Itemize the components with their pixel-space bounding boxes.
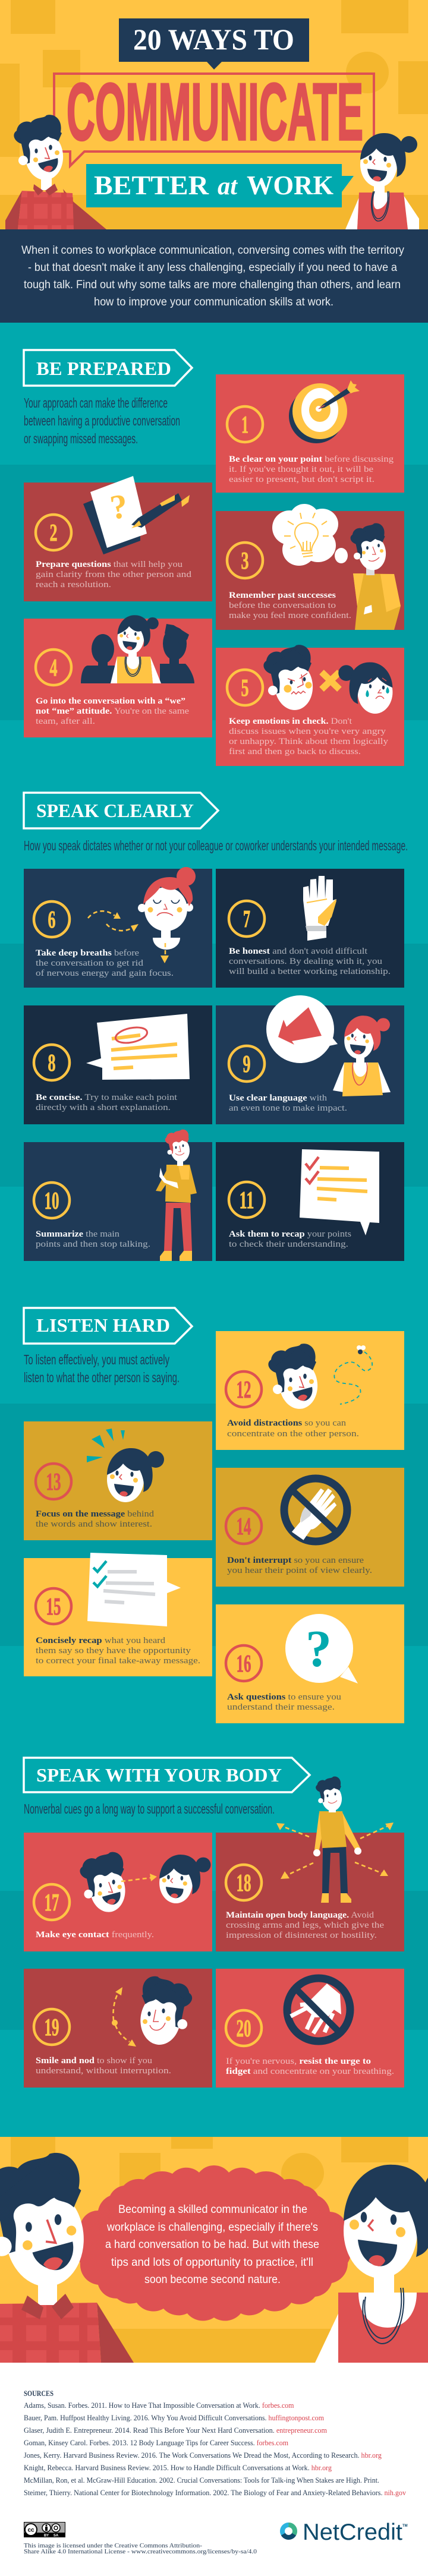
heading: be prepared: BE PREPARED xyxy=(36,358,171,379)
panel 9: clear language: an even tone to make impact. xyxy=(229,1103,347,1113)
character: woman xyxy=(345,133,419,229)
panel 10: summarize: Summarize the main xyxy=(36,1229,120,1239)
icon: question bubble xyxy=(285,1614,358,1683)
panel 17: eye contact xyxy=(24,1833,212,1951)
panel 1: clear point: 1 xyxy=(241,411,248,438)
icon: x mark xyxy=(322,672,339,689)
character: woman xyxy=(315,2165,428,2363)
section: be prepared xyxy=(24,350,404,766)
heading: be prepared xyxy=(24,350,192,386)
title: better at work: WORK xyxy=(247,171,333,200)
panel 2: prepare questions: reach a resolution. xyxy=(36,580,111,589)
panel 7: be honest xyxy=(216,869,404,988)
heading: listen hard: LISTEN HARD xyxy=(36,1314,170,1336)
panel 3: past successes: before the conversation to xyxy=(229,601,336,610)
intro panel: how to improve your communication skills at work. xyxy=(94,296,333,308)
panel 9: clear language xyxy=(216,995,404,1124)
panel 4: we not me: not “me” attitude. You're on the same xyxy=(36,707,189,716)
panel 7: be honest: Be honest and don't avoid difficult xyxy=(229,947,368,956)
panel 10: summarize: points and then stop talking. xyxy=(36,1240,150,1249)
panel 20: resist the urge to fidget: 20 xyxy=(237,2014,251,2042)
icon: note with highlighted line xyxy=(86,1014,190,1080)
icon: breathing woman xyxy=(138,867,196,950)
callout: closing message xyxy=(75,2165,353,2321)
panel 12: avoid distractions: Avoid distractions so you can xyxy=(227,1418,347,1428)
panel 15: concisely recap xyxy=(24,1553,212,1676)
panel 2: prepare questions: gain clarity from the other person and xyxy=(36,570,192,579)
panel 18: open body language xyxy=(216,1777,404,1951)
license badge: cc xyxy=(27,2527,34,2534)
panel 16: ask questions: 16 xyxy=(237,1650,251,1677)
intro text: or swapping missed messages. xyxy=(24,431,138,446)
panel 5: keep emotions in check: discuss issues when you're very angry xyxy=(229,727,386,736)
panel 5: keep emotions in check: 5 xyxy=(241,674,248,701)
title: 20 ways to xyxy=(119,18,309,70)
panel 13: focus on the message: 13 xyxy=(46,1468,61,1495)
icon: thought bubble with light bulb xyxy=(272,504,348,566)
license badge xyxy=(24,2522,65,2537)
intro text xyxy=(24,395,180,446)
panel 15: concisely recap: Concisely recap what you heard xyxy=(36,1636,166,1645)
panel 11: ask to recap: Ask them to recap your points xyxy=(229,1229,351,1239)
panel 19: smile and nod: Smile and nod to show if you xyxy=(36,2056,153,2066)
sources: McMillan, Ron, et al. McGraw-Hill Education. 2002. Crucial Conversations: Tools for Talk-ing When Stakes are High. Print. xyxy=(24,2476,379,2484)
character: speaking woman xyxy=(333,1016,391,1096)
panel 9: clear language: Use clear language with xyxy=(229,1093,328,1103)
icon: crying woman xyxy=(338,663,392,714)
closing banner xyxy=(0,2137,428,2363)
license text: Share Alike 4.0 International License - www.creativecommons.org/licenses/by-sa/4.0 xyxy=(24,2548,257,2555)
icon: no hand sign xyxy=(284,1478,347,1544)
panel 3: past successes: 3 xyxy=(241,547,248,574)
intro text: To listen effectively, you must actively xyxy=(24,1352,169,1367)
arrows: breath flow xyxy=(88,911,169,963)
panel 5: keep emotions in check: Keep emotions in check. Don't xyxy=(229,717,353,726)
panel 6: deep breaths xyxy=(24,867,212,988)
panel 4: we not me: team, after all. xyxy=(36,717,95,726)
callout: closing message: soon become second nature. xyxy=(144,2274,281,2286)
panel 12: avoid distractions: concentrate on the other person. xyxy=(227,1429,359,1439)
panel 19: smile and nod: understand, without interruption. xyxy=(36,2066,171,2076)
panel 7: be honest: conversations. By dealing with it, you xyxy=(229,957,383,966)
panel 4: we not me: 4 xyxy=(50,654,57,681)
heading: speak with your body: SPEAK WITH YOUR BODY xyxy=(36,1764,282,1786)
title: 20 ways to: 20 WAYS TO xyxy=(133,23,294,56)
icon: checklist note xyxy=(87,1553,181,1626)
icon: question sheet and pen xyxy=(83,476,190,554)
panel 12: avoid distractions xyxy=(216,1331,404,1450)
sources: SOURCES xyxy=(24,2389,54,2398)
intro text xyxy=(24,1352,180,1385)
character: thinking man xyxy=(351,523,401,630)
panel 19: smile and nod: 19 xyxy=(44,2013,59,2041)
license badge: SA xyxy=(54,2534,59,2537)
intro text: between having a productive conversation xyxy=(24,413,180,428)
sources: Knight, Rebecca. Harvard Business Review. 2015. How to Handle Difficult Conversations at Work. hbr.org xyxy=(24,2464,332,2472)
panel 2: prepare questions xyxy=(24,476,212,601)
icon: two faces looking at each other xyxy=(80,1852,210,1914)
panel 9: clear language: 9 xyxy=(243,1050,251,1077)
icon: fly with dashed path xyxy=(334,1345,372,1404)
panel 20: resist the urge to fidget: fidget and concentrate on your breathing. xyxy=(226,2067,394,2076)
panel 18: open body language: 18 xyxy=(237,1869,251,1896)
heading: listen hard xyxy=(24,1308,192,1344)
panel 8: be concise: directly with a short explanation. xyxy=(36,1103,171,1112)
panel 7: be honest: 7 xyxy=(243,905,250,932)
panel 5: keep emotions in check xyxy=(216,645,404,766)
intro panel xyxy=(0,229,428,323)
icon: no fidgeting sign xyxy=(287,1978,350,2041)
sources: Goman, Kinsey Carol. Forbes. 2013. 12 Body Language Tips for Career Success. forbes.com xyxy=(24,2439,288,2447)
panel 16: ask questions: Ask questions to ensure you xyxy=(227,1692,342,1702)
sources: Glaser, Judith E. Entrepreneur. 2014. Read This Before Your Next Hard Conversation. entrepreneur.com xyxy=(24,2426,327,2435)
panel 20: resist the urge to fidget xyxy=(216,1969,404,2088)
panel 13: focus on the message xyxy=(24,1421,212,1540)
callout: closing message: a hard conversation to be had. But with these xyxy=(105,2238,319,2251)
logo: NetCredit: NetCredit xyxy=(303,2520,402,2545)
panel 15: concisely recap: to correct your final take-away message. xyxy=(36,1656,200,1666)
icon: raised hand xyxy=(303,876,336,941)
sources: Adams, Susan. Forbes. 2011. How to Have That Impossible Conversation at Work. forbes.com xyxy=(24,2401,294,2410)
icon: target xyxy=(289,380,360,443)
panel 8: be concise: 8 xyxy=(48,1049,56,1076)
sources xyxy=(24,2389,407,2497)
panel 3: past successes: Remember past successes xyxy=(229,591,336,600)
intro text: listen to what the other person is saying. xyxy=(24,1370,180,1385)
panel 13: focus on the message: the words and show interest. xyxy=(36,1519,152,1529)
intro text: Your approach can make the difference xyxy=(24,395,168,411)
panel 5: keep emotions in check: or unhappy. Think about them logically xyxy=(229,737,389,746)
icon: nodding man xyxy=(138,1976,192,2047)
heading: speak with your body xyxy=(24,1758,310,1792)
icon: question sheet and pen: ? xyxy=(108,486,130,527)
license text xyxy=(24,2542,257,2555)
panel 6: deep breaths: of nervous energy and gain focus. xyxy=(36,969,174,978)
panel 19: smile and nod xyxy=(24,1969,212,2088)
icon: checklist bubble xyxy=(300,1149,379,1235)
heading: speak clearly: SPEAK CLEARLY xyxy=(36,800,194,821)
panel 18: open body language: impression of disinterest or hostility. xyxy=(226,1931,377,1940)
panel 3: past successes: make you feel more confident. xyxy=(229,611,351,620)
panel 4: we not me: Go into the conversation with a “we” xyxy=(36,696,185,706)
callout: closing message: Becoming a skilled communicator in the xyxy=(118,2203,307,2216)
panel 18: open body language: crossing arms and legs, which give the xyxy=(226,1921,384,1930)
section: listen hard xyxy=(24,1308,404,1723)
section: speak with your body xyxy=(24,1758,404,2088)
panel 1: clear point: Be clear on your point before discussing xyxy=(229,455,394,464)
teal background with bands xyxy=(0,323,428,2137)
callout: closing message: workplace is challenging, especially if there's xyxy=(106,2221,318,2234)
arrows: nod up and down xyxy=(112,1987,136,2047)
sources: Jones, Kerry. Harvard Business Review. 2016. The Work Conversations We Dread the Most, According to Research. hbr.org xyxy=(24,2451,382,2460)
icon: man distracted xyxy=(268,1344,320,1411)
character: man xyxy=(5,115,106,229)
icon: question bubble: ? xyxy=(306,1620,332,1678)
panel 5: keep emotions in check: first and then go back to discuss. xyxy=(229,747,361,756)
intro panel: tough talk. Find out why some talks are more challenging than others, and learn xyxy=(24,279,401,291)
title: better at work: at xyxy=(218,173,238,200)
panel 16: ask questions: understand their message. xyxy=(227,1702,335,1712)
sources: Steimer, Thierry. National Center for Biotechnology Information. 2002. The Biology of Fear and Anxiety-Related Behaviors. nih.gov xyxy=(24,2489,407,2497)
character: standing man xyxy=(156,1130,197,1261)
panel 8: be concise: Be concise. Try to make each point xyxy=(36,1093,178,1102)
header banner xyxy=(0,0,428,229)
panel 10: summarize: 10 xyxy=(44,1187,59,1214)
icon: attentive woman xyxy=(87,1429,164,1502)
panel 6: deep breaths: Take deep breaths before xyxy=(36,948,139,958)
panel 1: clear point: easier to present, but don't script it. xyxy=(229,475,374,484)
panel 2: prepare questions: 2 xyxy=(50,519,57,546)
panel 11: ask to recap: 11 xyxy=(239,1186,254,1213)
sources: Bauer, Pam. Huffpost Healthy Living. 2016. Why You Avoid Difficult Conversations. huffingtonpost.com xyxy=(24,2414,324,2422)
panel 7: be honest: will build a better working relationship. xyxy=(229,967,391,976)
panel 11: ask to recap: to check their understanding. xyxy=(229,1240,348,1249)
panel 15: concisely recap: them say so they have the opportunity xyxy=(36,1646,191,1656)
panel 17: eye contact: Make eye contact frequently. xyxy=(36,1930,154,1940)
panel 15: concisely recap: 15 xyxy=(46,1593,61,1620)
character: man xyxy=(0,2153,134,2363)
logo: NetCredit: TM xyxy=(402,2524,408,2528)
icon: megaphone speech bubble xyxy=(266,995,338,1063)
panel 3: past successes xyxy=(216,504,404,630)
panel 18: open body language: Maintain open body language. Avoid xyxy=(226,1910,374,1920)
panel 14: don't interrupt: 14 xyxy=(237,1512,251,1540)
callout: closing message: tips and lots of opportunity to practice, it'll xyxy=(111,2256,313,2269)
panel 8: be concise xyxy=(24,1005,212,1124)
panel 14: don't interrupt: Don't interrupt so you can ensure xyxy=(227,1556,364,1565)
intro panel: - but that doesn't make it any less challenging, especially if you need to have a xyxy=(28,261,397,274)
title: better at work xyxy=(86,164,354,207)
arrows: open stance xyxy=(276,1823,394,1879)
panel 16: ask questions xyxy=(216,1604,404,1723)
panel 14: don't interrupt: you hear their point of view clearly. xyxy=(227,1566,372,1575)
panel 14: don't interrupt xyxy=(216,1468,404,1587)
intro text: Nonverbal cues go a long way to support a successful conversation. xyxy=(24,1801,275,1817)
panel 4: we not me xyxy=(24,615,212,737)
icon: team of three xyxy=(81,615,194,683)
title: better at work: BETTER xyxy=(94,171,209,200)
intro panel: When it comes to workplace communication, conversing comes with the territory xyxy=(21,244,404,257)
heading: speak clearly xyxy=(24,793,218,828)
panel 6: deep breaths: the conversation to get rid xyxy=(36,958,144,968)
panel 1: clear point xyxy=(216,374,404,493)
section: speak clearly xyxy=(24,793,408,1261)
panel 6: deep breaths: 6 xyxy=(48,906,56,933)
panel 20: resist the urge to fidget: If you're nervous, resist the urge to xyxy=(226,2057,371,2066)
panel 11: ask to recap xyxy=(216,1142,404,1261)
panel 10: summarize xyxy=(24,1130,212,1261)
panel 13: focus on the message: Focus on the message behind xyxy=(36,1509,155,1519)
panel 2: prepare questions: Prepare questions that will help you xyxy=(36,560,183,569)
panel 1: clear point: it. If you've thought it out, it will be xyxy=(229,465,373,474)
license badge: BY xyxy=(44,2534,49,2537)
panel 17: eye contact: 17 xyxy=(44,1888,59,1916)
character: open-stance man xyxy=(313,1777,361,1903)
panel 12: avoid distractions: 12 xyxy=(237,1376,251,1403)
icon: angry man xyxy=(263,645,315,712)
license text: This image is licensed under the Creative Commons Attribution- xyxy=(24,2542,202,2549)
